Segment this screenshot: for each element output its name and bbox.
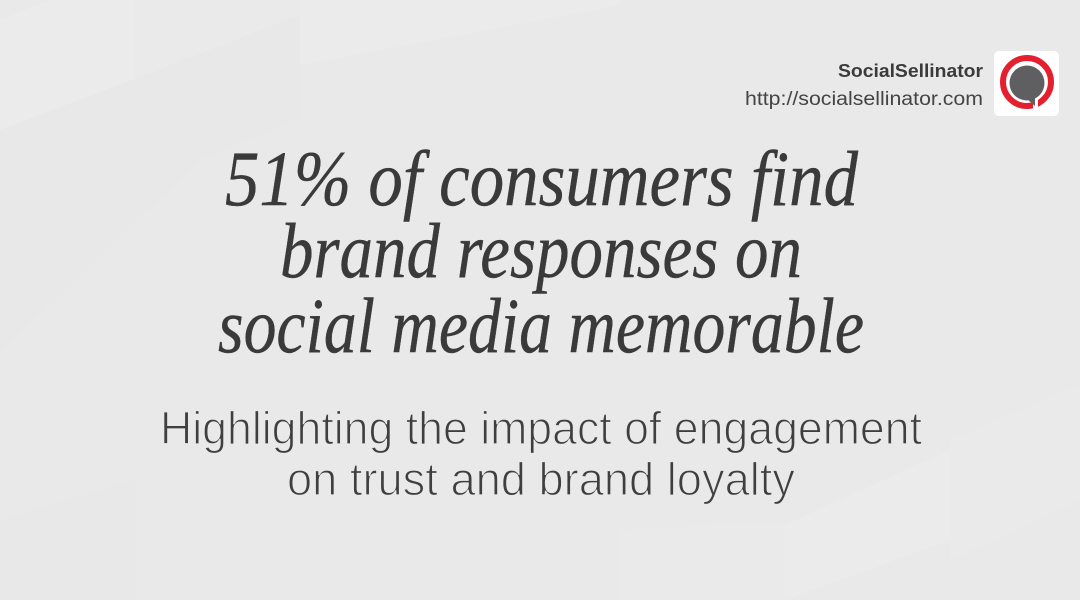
brand url: http://socialsellinator.com — [745, 89, 983, 110]
subtitle — [160, 402, 922, 505]
icon: SocialSellinator logo — [994, 51, 1059, 116]
title: social media memorable — [218, 282, 864, 369]
brand name: SocialSellinator — [838, 61, 983, 81]
subtitle: on trust and brand loyalty — [287, 453, 795, 505]
title — [218, 135, 864, 369]
title: brand responses on — [280, 207, 802, 294]
title: 51% of consumers find — [225, 135, 859, 222]
subtitle: Highlighting the impact of engagement — [160, 402, 922, 454]
